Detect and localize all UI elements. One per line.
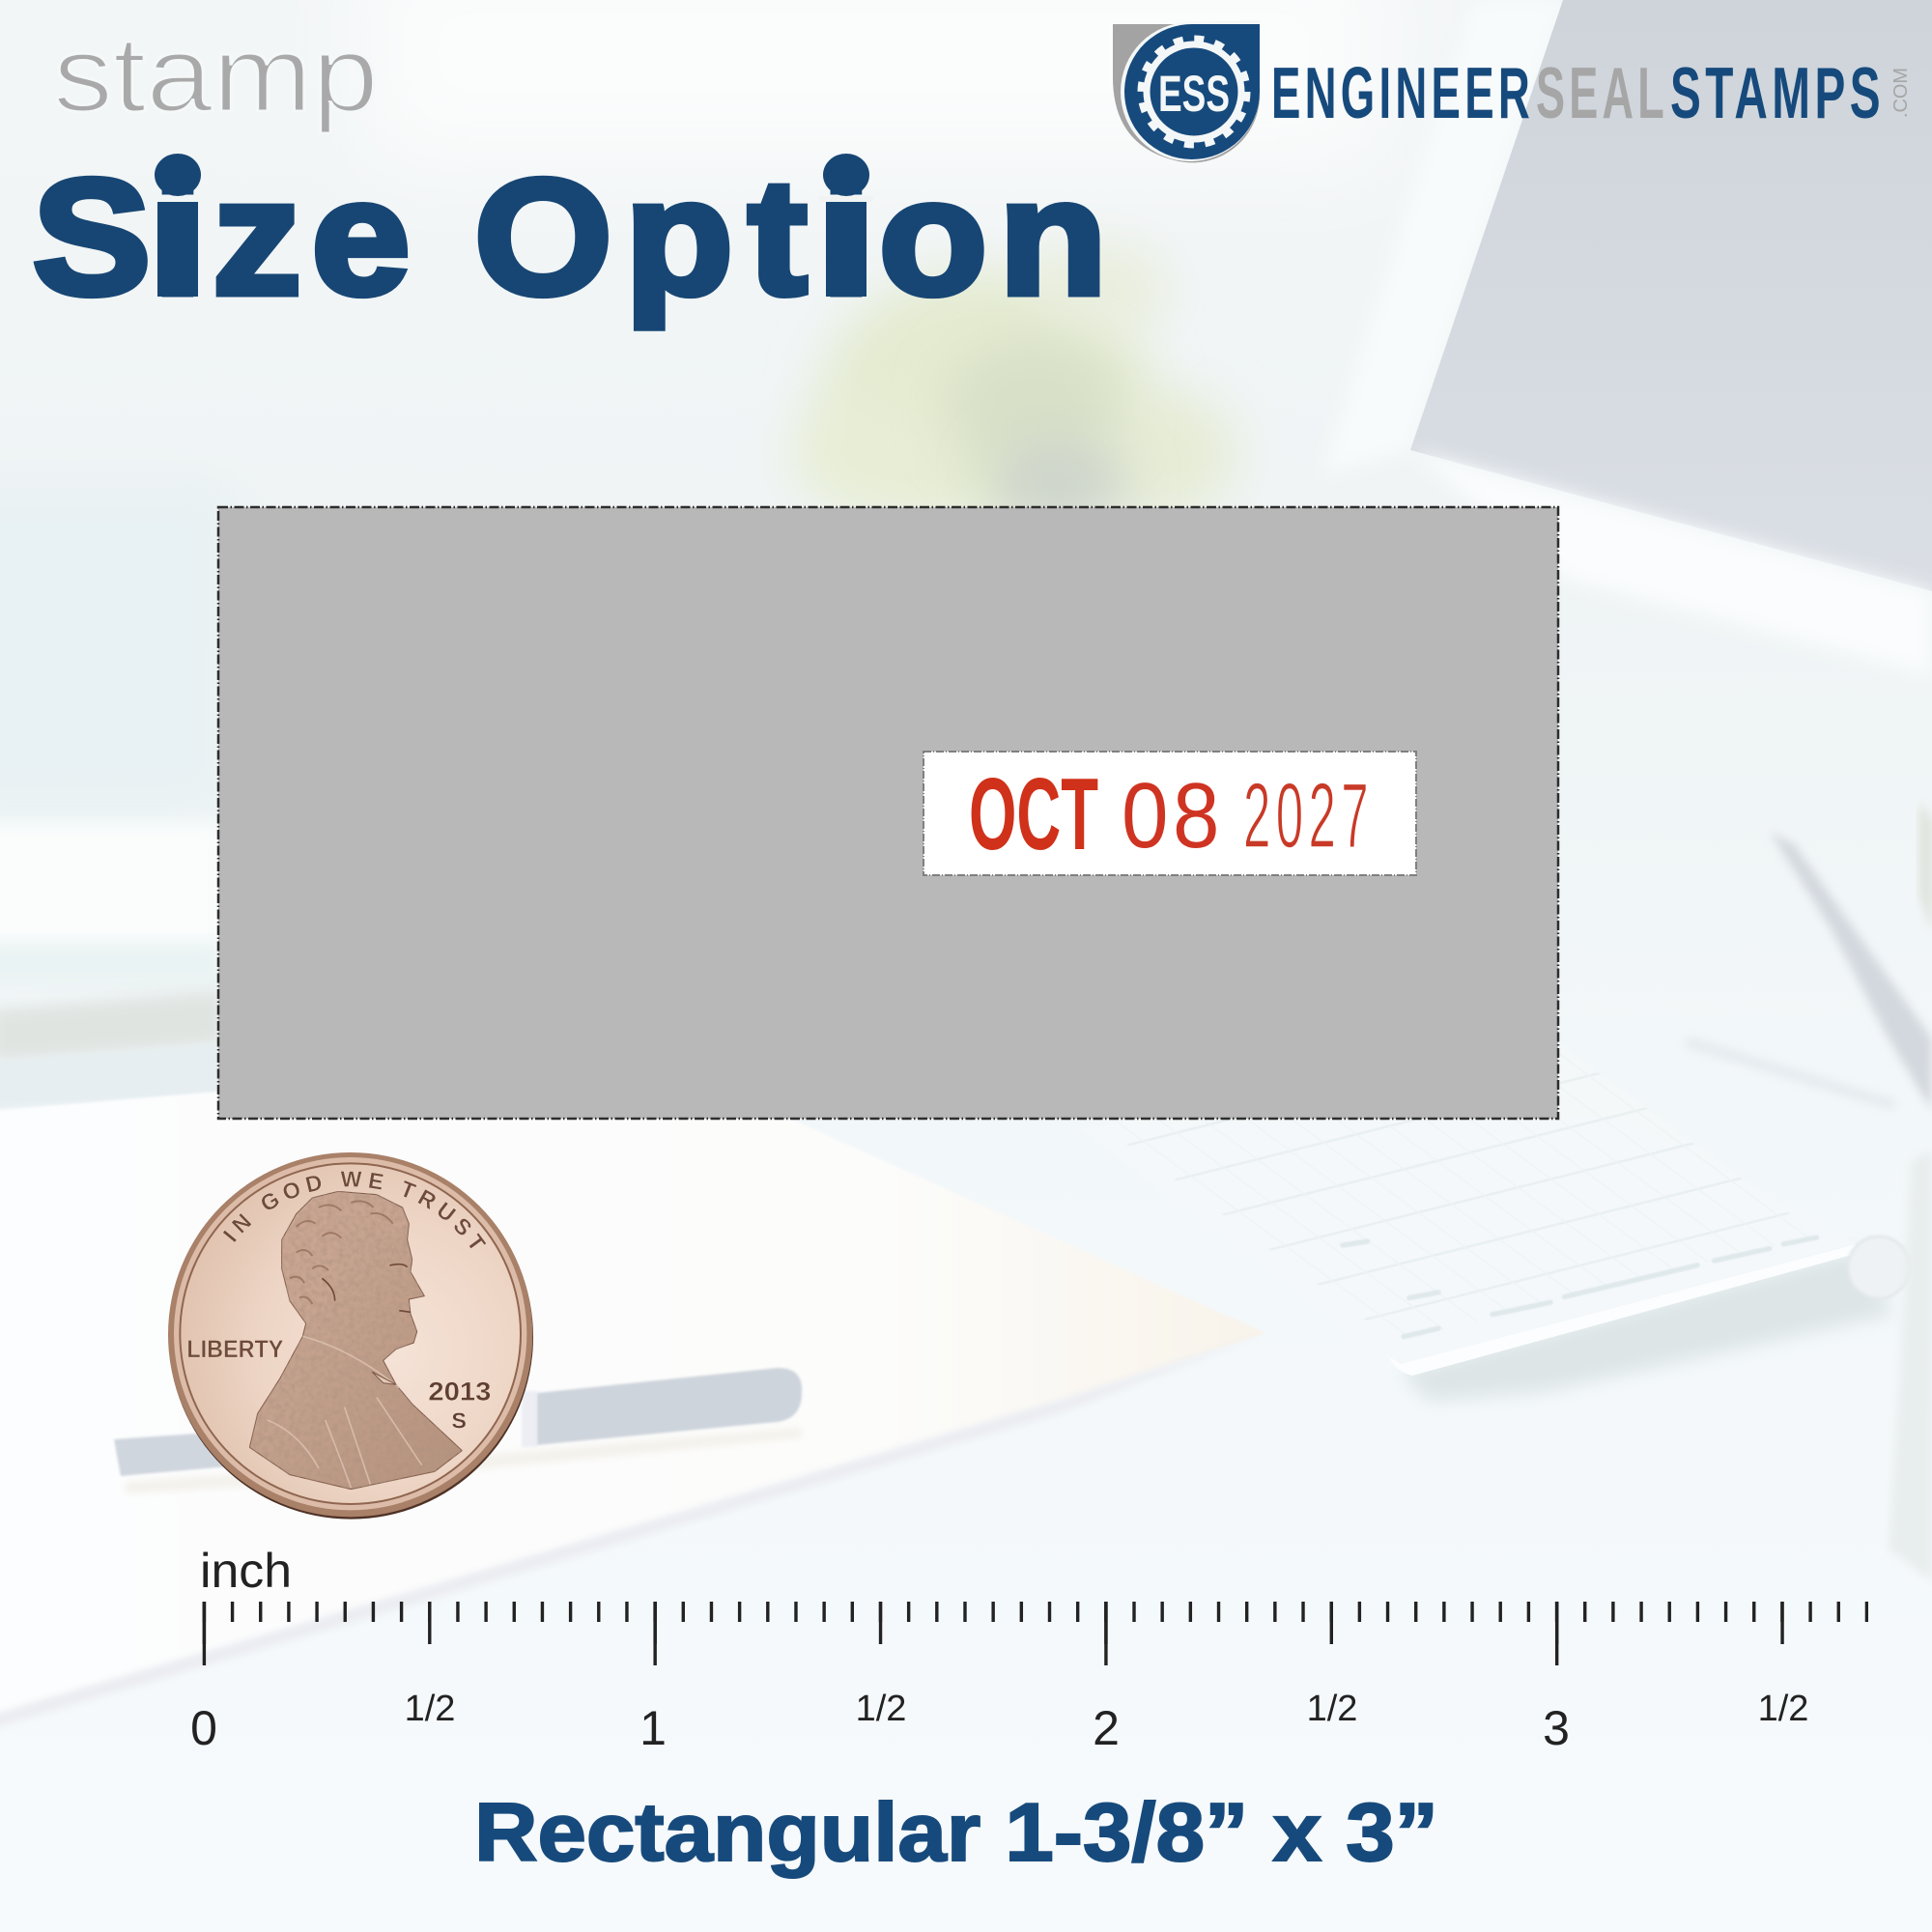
gray stamp area: [218, 507, 1558, 1119]
coin text: LIBERTY: LIBERTY: [186, 1337, 284, 1363]
ruler half marks: 1/2: [1758, 1689, 1808, 1729]
date: 08: 08: [1122, 764, 1224, 867]
ruler half marks: 1/2: [856, 1689, 906, 1729]
ruler half marks: [405, 1689, 1808, 1729]
ruler ticks: [203, 1611, 1868, 1634]
logo wordmark: SEAL: SEAL: [1536, 52, 1668, 133]
logo wordmark: .COM: .COM: [1890, 68, 1912, 118]
penny size reference: [168, 1152, 533, 1520]
subtitle: stamp: stamp: [53, 14, 379, 134]
size caption: Rectangular 1-3/8” x 3”: [474, 1787, 1438, 1879]
keyboard: [1079, 1021, 1910, 1401]
date: 2027: 2027: [1243, 764, 1374, 867]
ruler: [190, 1544, 1868, 1755]
logo: Engineer Seal Stamps: [1113, 20, 1912, 162]
ruler numbers: 0: [190, 1701, 217, 1755]
Lincoln bust: [249, 1191, 462, 1490]
blurred plant: [792, 242, 1236, 526]
date: OCT: OCT: [969, 757, 1098, 871]
ruler half marks: 1/2: [1307, 1689, 1357, 1729]
ruler half marks: 1/2: [405, 1689, 455, 1729]
coin text: mint mark: S: [451, 1407, 467, 1433]
ruler numbers: [190, 1701, 1570, 1755]
logo emblem: ESS gear: ESS: [1158, 66, 1230, 123]
hair curls: [290, 1201, 393, 1304]
pen on desk: [114, 1368, 802, 1493]
ruler numbers: 1: [639, 1701, 667, 1755]
pencils and jar: [1687, 801, 1932, 1582]
ruler numbers: 3: [1543, 1701, 1570, 1755]
fallen paper sheet: [0, 1092, 1265, 1716]
title: Size Option: Size Option: [33, 146, 1107, 329]
ruler numbers: 2: [1093, 1701, 1120, 1755]
logo emblem: ESS gear: [1113, 20, 1260, 162]
coin motto: [234, 1187, 474, 1254]
date stamp impression: [923, 752, 1416, 875]
penny size reference: IN GOD WE TRUST: [222, 1171, 487, 1248]
coin text: 2013: 2013: [428, 1377, 491, 1406]
logo wordmark: ENGINEER: ENGINEER: [1271, 52, 1534, 133]
ruler unit label: inch: [200, 1544, 292, 1598]
